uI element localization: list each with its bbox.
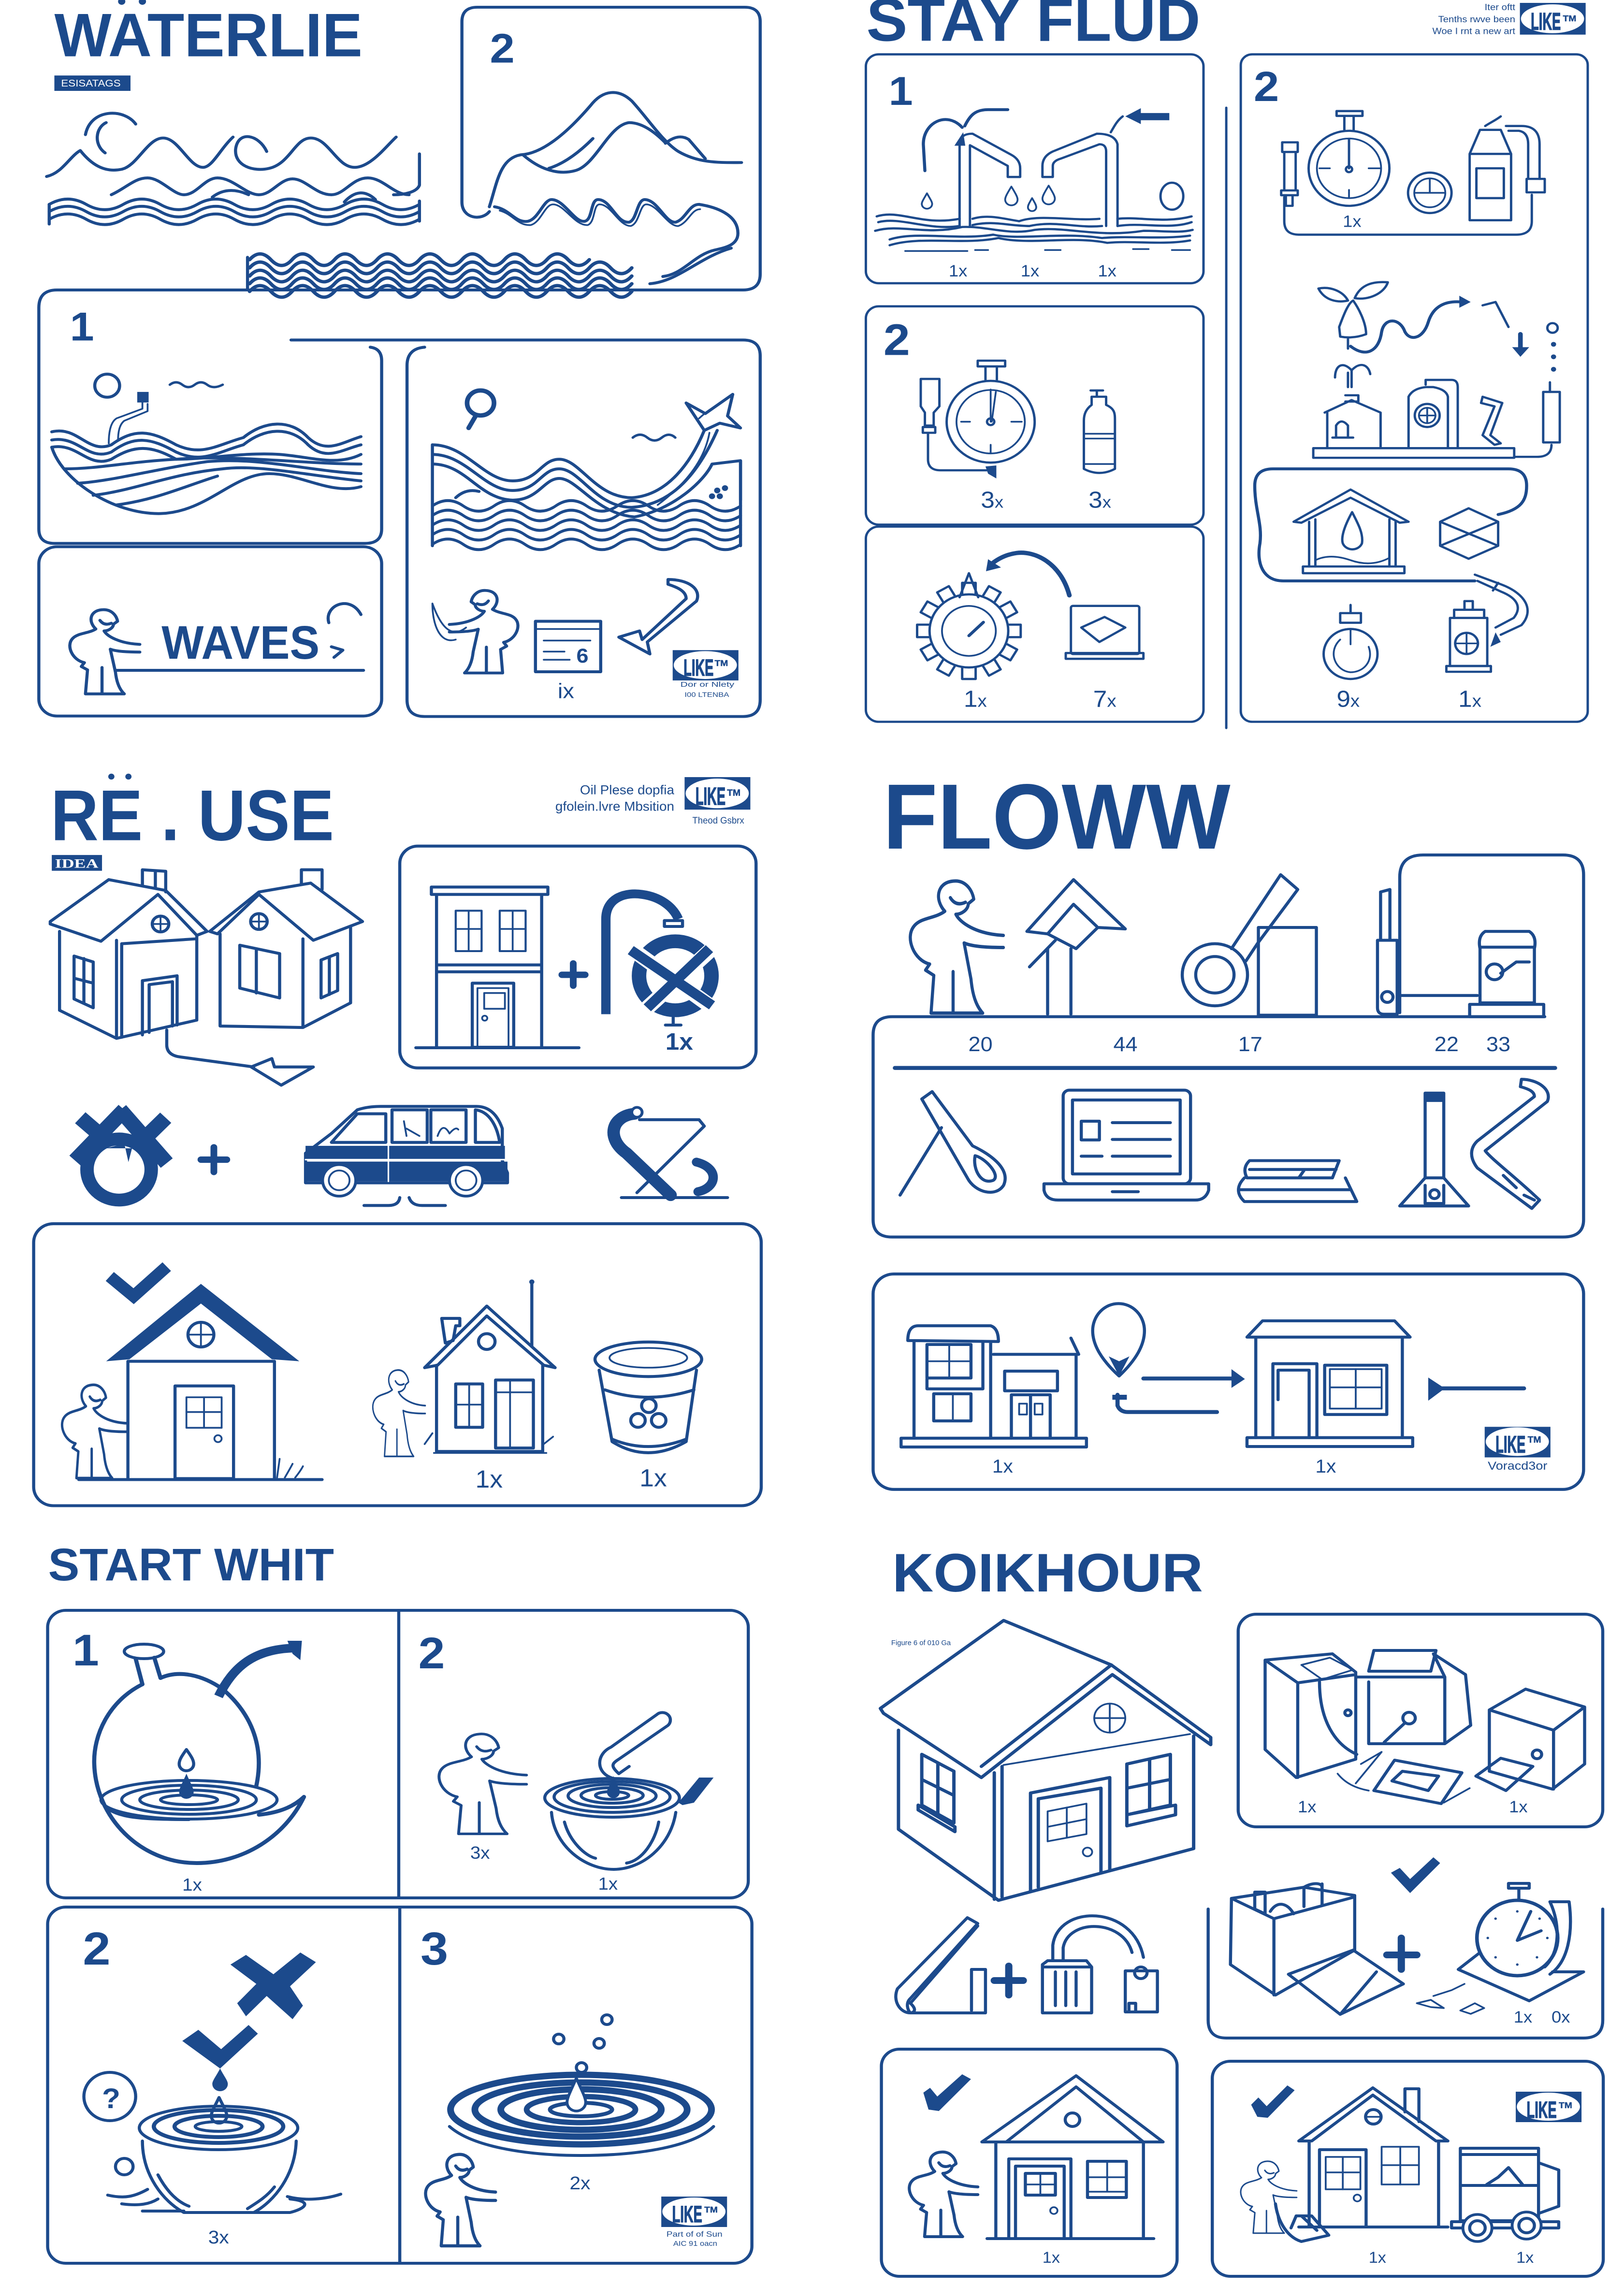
- plus: [201, 1147, 227, 1172]
- section: Waterlie: [39, 0, 760, 717]
- section: Floww: [873, 765, 1583, 1490]
- map pin: [1093, 1303, 1145, 1376]
- bucket: [595, 1342, 702, 1376]
- valve and tube: [921, 379, 988, 470]
- section: Re.Use: [34, 774, 761, 1506]
- step number 1: 1: [72, 1626, 99, 1675]
- quantity label: 1x: [666, 1028, 693, 1055]
- section: Koikhour: [880, 1543, 1603, 2276]
- flat sheet parts: [1374, 1760, 1462, 1804]
- stopwatch: [1477, 1900, 1558, 1976]
- panel: step 2 stopwatch and bottle: 3x: [1088, 487, 1111, 513]
- check mark: [1391, 1857, 1440, 1893]
- check mark: [923, 2074, 971, 2111]
- icon: van: [305, 1106, 508, 1205]
- panel: step 1 flask and 2 bowl: 1x: [182, 1875, 202, 1895]
- illustration: large house: [880, 1620, 1211, 1900]
- right building: [1247, 1438, 1413, 1446]
- title: Re . Use: RE . USE: [51, 776, 334, 856]
- quantity labels: 1x: [949, 262, 968, 280]
- panel: steps 2 and 3: 3x: [208, 2227, 229, 2248]
- logo: LIKE: [1527, 2097, 1557, 2123]
- panel: whale tail in waves: [291, 340, 760, 717]
- check mark: [182, 2025, 258, 2068]
- faucet and no symbol: [606, 894, 679, 1014]
- quantity labels: 1x: [992, 1456, 1013, 1477]
- panel: person and house: [882, 2049, 1177, 2276]
- logo: [1485, 1427, 1551, 1473]
- middle carton: [1357, 1650, 1471, 1744]
- person looking: [426, 2155, 495, 2246]
- house: [982, 2076, 1163, 2239]
- logo: AIC 91 oacn: [673, 2240, 717, 2248]
- person pointing: [439, 1734, 526, 1834]
- logo: TM: [704, 2205, 718, 2214]
- check mark: [1251, 2085, 1295, 2118]
- ring tool and box: [1182, 944, 1247, 1006]
- person: [909, 2152, 978, 2237]
- faucets: [923, 110, 1008, 171]
- hook arrow: [619, 579, 697, 654]
- panel: step 2 stopwatch and bottle: [866, 306, 1204, 525]
- step number 2: 2: [83, 1923, 111, 1975]
- panel: step 2 tall process: [1241, 54, 1588, 722]
- logo: I00 LTENBA: [684, 691, 729, 699]
- right carton: [1489, 1689, 1585, 1789]
- check mark: [110, 1267, 167, 1296]
- panel: step 2 tall process: 1x: [1343, 213, 1362, 231]
- panel: step 1 flask and 2 bowl: [48, 1610, 748, 1898]
- numbers: 20: [969, 1033, 993, 1056]
- device: [1378, 889, 1397, 1014]
- panel: parts list: 33: [1486, 1033, 1510, 1056]
- wave hull: [95, 374, 119, 397]
- panel: person, house and truck: 1x: [1516, 2249, 1534, 2267]
- building: [431, 887, 548, 1047]
- panel: check house, small house and bucket: 1x: [639, 1465, 667, 1492]
- quantity labels: 1x: [964, 686, 987, 712]
- arrow from house: [167, 1030, 313, 1085]
- small label tag: ESISATAGS: [61, 78, 121, 89]
- quantity labels: 1x: [476, 1466, 503, 1493]
- person with tail: [450, 591, 518, 673]
- header note and logo: Theod Gsbrx: [692, 815, 744, 826]
- header note and logo: Oil Plese dopfia: [580, 782, 675, 797]
- step number 2: 2: [419, 1629, 445, 1678]
- logo: LIKE: [683, 655, 713, 681]
- laptop: [1071, 606, 1139, 654]
- magnifier pin: [469, 417, 476, 428]
- step number 2: 2: [490, 25, 515, 72]
- panel: parts list: [873, 855, 1583, 1237]
- left-pointing arrow: [1438, 1387, 1524, 1390]
- logo: LIKE: [1495, 1431, 1525, 1458]
- illustration: open waves with sun: [46, 113, 420, 225]
- panel: step 1 faucets in water: [866, 54, 1204, 283]
- truck: [1460, 2148, 1559, 2221]
- panel: step 2 tall process: 1x: [1458, 686, 1481, 712]
- right house: [210, 883, 362, 940]
- logo: Voracd3or: [1488, 1460, 1547, 1473]
- flask with swirl: [94, 1674, 304, 1863]
- laptop: [1063, 1090, 1190, 1184]
- panel: parts list: 22: [1435, 1033, 1459, 1056]
- header note and logo: Woe I rnt a new art: [1433, 26, 1516, 36]
- section: Stay Flud: [866, 0, 1588, 728]
- step number: 2: [884, 316, 910, 365]
- logo: TM: [1528, 1434, 1541, 1445]
- title: Waterlie: WATERLIE: [54, 1, 362, 70]
- shelf of small items: [1335, 365, 1370, 387]
- header note and logo: LIKE: [696, 783, 725, 810]
- person by house: [62, 1385, 127, 1478]
- jar: [1479, 931, 1535, 1003]
- logo: TM: [1559, 2100, 1572, 2110]
- bowl with stirrer: [545, 1779, 680, 1817]
- illustration: two houses and arrow: [50, 870, 362, 1085]
- water drops: [922, 193, 932, 209]
- step number: 1: [889, 69, 913, 114]
- quantity labels: 1x: [1514, 2008, 1533, 2026]
- small caption: Figure 6 of 010 Ga: [891, 1639, 951, 1647]
- stopwatch with tube and bottle: [1308, 131, 1390, 206]
- card with number: [536, 622, 601, 672]
- panel: building route: [873, 1274, 1583, 1490]
- plus: [994, 1966, 1023, 1995]
- logo: Part of of Sun: [667, 2230, 723, 2239]
- step number: 2: [1254, 63, 1279, 110]
- house: [106, 1284, 299, 1361]
- panel: step 1 faucets in water: 1x: [1098, 262, 1116, 280]
- icon: rod plus padlock: [896, 1916, 1158, 2013]
- bowl: [139, 2106, 298, 2150]
- header note and logo: Tenths rwve been: [1438, 14, 1515, 25]
- scraps: [1417, 1984, 1484, 2014]
- Idea tag: [52, 855, 102, 871]
- small label tag: [54, 75, 130, 91]
- quantity label: 1x: [1043, 2249, 1060, 2267]
- books: [1238, 1161, 1357, 1201]
- crate: [1440, 508, 1498, 559]
- header note and logo: TM: [1563, 13, 1576, 23]
- logo: [1516, 2092, 1581, 2123]
- panel: step 1 flask and 2 bowl: 3x: [470, 1843, 490, 1863]
- plant and pipeline: [1319, 282, 1388, 348]
- panel: person, house and truck: [1212, 2061, 1603, 2276]
- title: Floww: FLOWW: [883, 765, 1231, 868]
- text: waves: WAVES: [161, 617, 319, 669]
- panel: step 1 faucets in water: 1x: [1021, 262, 1040, 280]
- quantity labels: 1x: [1298, 1798, 1317, 1816]
- pump tank: [1450, 618, 1487, 666]
- title: Koikhour: KOIKHOUR: [892, 1543, 1203, 1603]
- logo: [661, 2197, 727, 2248]
- quantity labels: 3x: [981, 487, 1004, 513]
- logo: LIKE: [672, 2201, 702, 2227]
- mountain: [489, 92, 741, 207]
- panel: step 2 with mountain and river: [247, 7, 760, 297]
- curved arrow: [993, 553, 1069, 595]
- panel: open carton plus stopwatch: 0x: [1552, 2008, 1570, 2026]
- step number 1: 1: [70, 304, 94, 349]
- panel: gear and laptop: [866, 527, 1204, 722]
- panel: whale tail in waves: 6: [576, 645, 588, 667]
- panel: steps 2 and 3: ?: [102, 2083, 120, 2114]
- bubbles: [602, 2015, 612, 2025]
- carton: [1231, 1887, 1355, 1995]
- panel: step 1 flask and 2 bowl: 1x: [598, 1874, 618, 1894]
- quantity labels: 1x: [1369, 2249, 1386, 2267]
- logo: [673, 650, 739, 699]
- panel: open carton plus stopwatch: [1208, 1857, 1603, 2038]
- panel: boxes: 1x: [1509, 1798, 1528, 1816]
- panel: building plus faucet: [400, 846, 756, 1068]
- header note and logo: [555, 777, 750, 826]
- question bubble: [84, 2072, 136, 2121]
- panel: building route: 1x: [1315, 1456, 1336, 1477]
- gear with gauge: [917, 573, 1021, 679]
- arrows: [1117, 1378, 1234, 1412]
- person: [70, 609, 140, 694]
- logo: Dor or Nlety: [681, 680, 735, 689]
- small house: [425, 1306, 555, 1451]
- person with box: [1241, 2161, 1297, 2233]
- roof tool: [1027, 880, 1125, 1014]
- panel: boxes: [1238, 1614, 1603, 1827]
- house: [1299, 2088, 1448, 2227]
- panel: parts list: 44: [1114, 1033, 1138, 1056]
- panel: whale tail in waves: ix: [558, 679, 574, 703]
- header note and logo: [1433, 2, 1586, 36]
- small person: [373, 1370, 425, 1457]
- panel: check house, small house and bucket: [34, 1224, 761, 1506]
- section: Start Whit: [48, 1539, 752, 2263]
- looping tube: [1255, 469, 1527, 581]
- header note and logo: Iter oftt: [1485, 2, 1516, 13]
- quantity labels: 9x: [1336, 686, 1360, 712]
- icon: crossed drop ring: [75, 1110, 167, 1200]
- panel: steps 2 and 3: 2x: [570, 2173, 591, 2194]
- icon: crossed tool: [614, 1107, 727, 1198]
- left building: [901, 1438, 1087, 1447]
- person: [910, 881, 1003, 1013]
- panel: gear and laptop: 7x: [1093, 686, 1116, 712]
- logo: TM: [715, 658, 728, 668]
- stand: [1425, 1093, 1444, 1178]
- bottle: [1084, 390, 1115, 473]
- ripples: [450, 2075, 711, 2144]
- panel: steps 2 and 3: [48, 1907, 752, 2263]
- panel: parts list: 17: [1238, 1033, 1262, 1056]
- river: [494, 200, 738, 276]
- round flask: [1324, 629, 1378, 679]
- spoon tool: [900, 1092, 1005, 1195]
- panel: waves label with person: [39, 547, 382, 716]
- panel: step 1 boat-shaped wave: [39, 290, 382, 543]
- water: [877, 215, 1191, 221]
- stopwatch: [947, 381, 1035, 463]
- header note and logo: LIKE: [1531, 8, 1561, 35]
- hut with drop: [1293, 490, 1408, 566]
- step number 3: 3: [420, 1923, 448, 1975]
- drops: [212, 2068, 228, 2091]
- header note and logo: TM: [727, 788, 740, 798]
- left carton: [1265, 1654, 1356, 1778]
- bent pipe: [1472, 1079, 1548, 1208]
- hose: [1475, 575, 1528, 635]
- title: Start Whit: START WHIT: [48, 1539, 334, 1590]
- plus: [562, 964, 585, 985]
- Idea tag: IDEA: [55, 856, 99, 870]
- plus: [1387, 1938, 1417, 1969]
- header note and logo: gfolein.lvre Mbsition: [555, 799, 674, 813]
- divider between panels: [1225, 108, 1227, 728]
- whale and sea: [633, 434, 675, 440]
- left house: [50, 880, 207, 941]
- large cross: [231, 1952, 316, 2019]
